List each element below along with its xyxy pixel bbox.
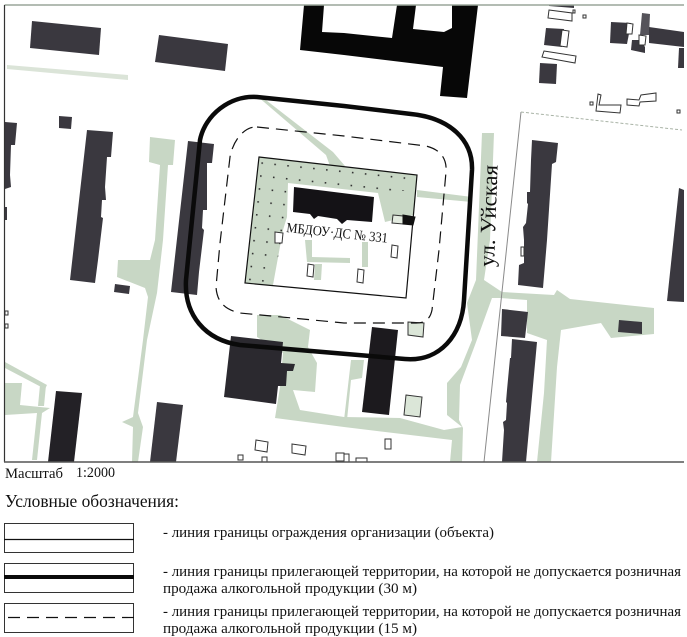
scale text xyxy=(5,465,115,482)
green areas: roads and lawns xyxy=(5,65,654,462)
scale text: 1:2000 xyxy=(76,465,115,481)
legend heading: Условные обозначения: xyxy=(5,491,179,511)
small outlined structures xyxy=(5,10,680,462)
15 m boundary dashed line xyxy=(216,127,446,323)
kindergarten main building xyxy=(293,187,374,224)
speckle on the site lawn xyxy=(245,157,417,285)
street boundary lines xyxy=(484,112,682,462)
30 m boundary thick line xyxy=(186,97,472,359)
legend item: 30 m boundary xyxy=(4,564,681,597)
map frame xyxy=(4,5,684,462)
map panel xyxy=(4,5,684,462)
kindergarten site: fence line xyxy=(245,157,417,298)
scale text: Масштаб xyxy=(5,466,63,482)
kindergarten small structures xyxy=(275,215,415,283)
residential buildings xyxy=(5,5,684,462)
street name label: ул. Уйская xyxy=(474,164,503,267)
legend item: 30 m boundary: продажа алкогольной продукции (30 м) xyxy=(163,581,417,597)
kindergarten label: МБДОУ·ДС № 331 xyxy=(286,221,389,247)
legend item: fence boundary xyxy=(4,524,494,552)
legend item: 15 m boundary xyxy=(4,604,681,637)
legend item: 30 m boundary: - линия границы прилегающей территории, на которой не допускается розничная xyxy=(163,564,681,580)
large black building at top xyxy=(300,5,478,98)
legend item: 15 m boundary: - линия границы прилегающей территории, на которой не допускается розничная xyxy=(163,604,681,620)
legend item: fence boundary: - линия границы ограждения организации (объекта) xyxy=(163,525,494,541)
legend item: 15 m boundary: продажа алкогольной продукции (15 м) xyxy=(163,621,417,637)
